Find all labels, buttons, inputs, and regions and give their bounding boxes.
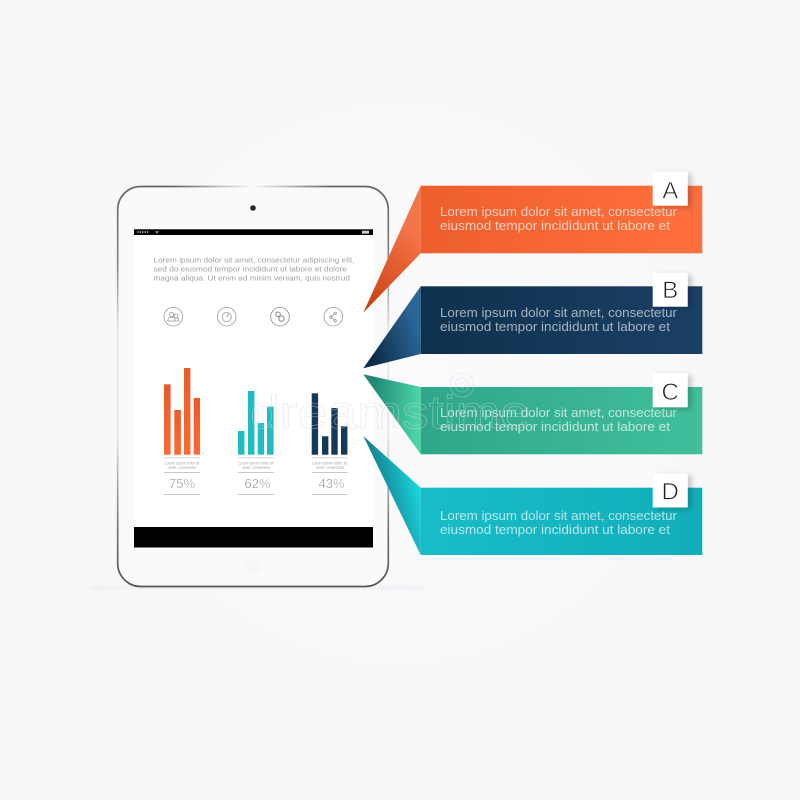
tag C: [653, 373, 688, 407]
tag B: [653, 273, 688, 307]
tag D: [653, 474, 688, 508]
caption: Lorem ipsum dolor sit: [164, 460, 200, 466]
icon: people: [164, 307, 183, 326]
pointer C: [363, 374, 421, 454]
tablet screen: [134, 229, 373, 527]
faint stock watermark: dreamstime: [250, 386, 530, 438]
faint stock watermark: [250, 373, 530, 438]
chart: teal bars 62%: [238, 391, 274, 495]
icon: gears: [271, 307, 289, 326]
banner B: [421, 286, 702, 354]
banner B text: eiusmod tempor incididunt ut labore et: [440, 320, 671, 334]
banner C text: eiusmod tempor incididunt ut labore et: [440, 420, 671, 434]
chart: navy bars 43%: [312, 393, 348, 495]
ribbon B: [363, 273, 702, 368]
pointer B: [363, 286, 421, 368]
banner C: [421, 387, 702, 454]
intro paragraph: magna aliqua. Ut enim ad minim veniam, quis nostrud: [154, 274, 350, 282]
banner C text: [440, 406, 677, 434]
bottom black bar: [134, 527, 373, 548]
icon: share: [324, 307, 343, 326]
tag C: C: [662, 379, 679, 406]
banner C text: Lorem ipsum dolor sit amet, consectetur: [440, 406, 677, 420]
home button: [245, 559, 261, 575]
caption: [164, 460, 200, 470]
tag B: B: [662, 277, 678, 304]
banner D: [421, 488, 702, 555]
caption: amet, consectetur: [316, 465, 345, 470]
banner A: [421, 186, 702, 253]
tag D: D: [662, 478, 679, 506]
tag A: A: [662, 178, 678, 204]
caption: Lorem ipsum dolor sit: [238, 460, 274, 466]
icon: clock: [217, 307, 236, 326]
banner B text: Lorem ipsum dolor sit amet, consectetur: [440, 306, 677, 320]
camera: [250, 205, 256, 211]
banner D text: [440, 509, 677, 537]
percentage: 43%: [318, 476, 345, 491]
caption: amet, consectetur: [168, 465, 197, 470]
banner D text: eiusmod tempor incididunt ut labore et: [440, 523, 671, 537]
caption: [312, 460, 348, 470]
ribbon D: [363, 436, 702, 555]
intro paragraph: sed do eiusmod tempor incididunt ut labore et dolore: [154, 264, 347, 274]
banner A text: Lorem ipsum dolor sit amet, consectetur: [440, 205, 677, 219]
status bar: [134, 229, 373, 235]
tablet device: [118, 184, 388, 586]
banner D text: Lorem ipsum dolor sit amet, consectetur: [440, 509, 677, 523]
banner A text: eiusmod tempor incididunt ut labore et: [440, 219, 671, 233]
tablet shadow: [90, 586, 425, 589]
intro paragraph: [154, 256, 354, 282]
pointer D: [363, 436, 421, 555]
ribbon A: [363, 172, 702, 313]
caption: amet, consectetur: [242, 465, 271, 470]
banner A text: [440, 205, 677, 233]
banner B text: [440, 306, 677, 334]
chart: orange bars 75%: [164, 368, 200, 495]
intro paragraph: Lorem ipsum dolor sit amet, consectetur adipiscing elit,: [154, 256, 354, 264]
pointer A: [363, 186, 421, 313]
caption: Lorem ipsum dolor sit: [312, 460, 348, 466]
percentage: 62%: [244, 476, 271, 491]
tag A: [653, 172, 688, 206]
caption: [238, 460, 274, 470]
percentage: 75%: [169, 476, 195, 491]
ribbon C: [363, 373, 702, 454]
